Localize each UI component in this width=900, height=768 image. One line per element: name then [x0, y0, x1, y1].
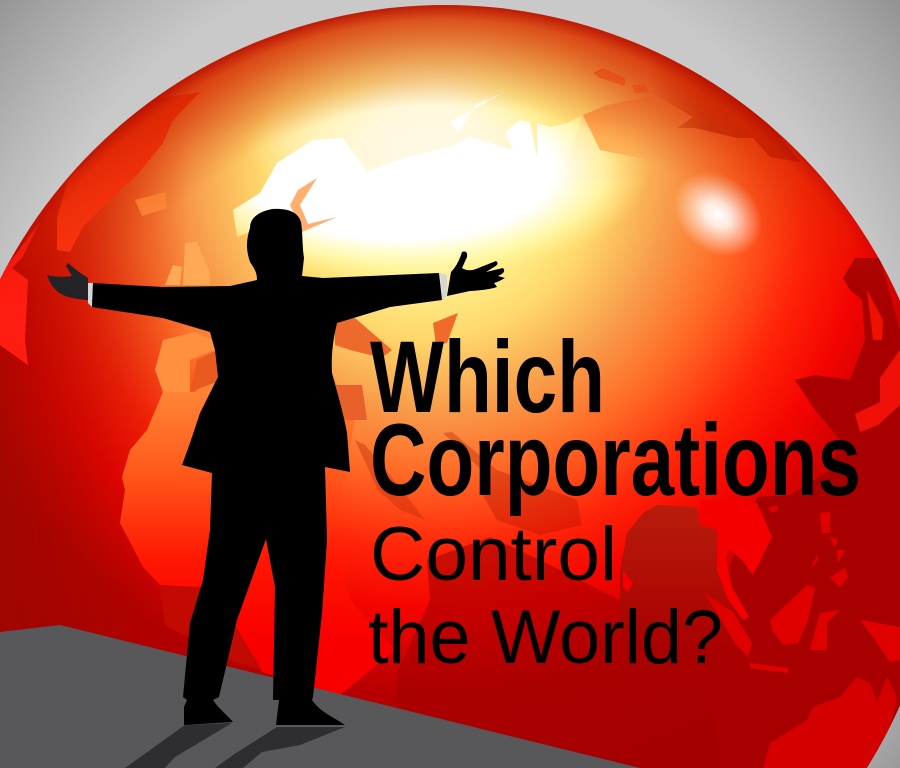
man silhouette [47, 209, 505, 725]
land: australia [763, 677, 897, 768]
land: korea sliver [867, 290, 883, 340]
island: java [750, 663, 788, 673]
land: japan [855, 350, 900, 432]
island: borneo [770, 585, 815, 645]
land: egypt patch [333, 385, 367, 420]
title line: Control: Control [370, 512, 617, 597]
floor [0, 625, 640, 768]
title [368, 320, 861, 680]
land: iceland [135, 192, 167, 216]
land: mediterranean patch [190, 351, 218, 392]
island: sulawesi [810, 610, 840, 650]
left hand [47, 263, 88, 300]
land: africa [120, 370, 395, 695]
title line: Which: Which [370, 320, 605, 434]
land: gulf of guinea [160, 585, 262, 670]
islands: indonesia and neighbours [623, 505, 900, 768]
land: ireland [165, 265, 182, 285]
island: sumatra [704, 593, 752, 657]
land: china and se asia [728, 258, 900, 768]
land: greece patch [433, 313, 458, 345]
island: philippines [810, 512, 848, 587]
right cuff [440, 273, 447, 300]
island: hainan [768, 505, 778, 513]
island: sri lanka [623, 570, 633, 592]
shoe shadows [125, 723, 345, 768]
land: arabia [480, 470, 582, 535]
land: greenland [57, 92, 200, 252]
highlight: specular [676, 174, 760, 255]
right hand [447, 252, 505, 296]
land: canada edge [0, 222, 40, 365]
island: new guinea [860, 620, 900, 662]
left cuff [88, 283, 93, 307]
body [92, 209, 442, 725]
land: iberia [155, 332, 214, 392]
land: russia east shade [663, 67, 800, 162]
land: europe and russia [233, 115, 643, 270]
land: novaya zemlya [450, 92, 505, 133]
islands: north pacific [593, 68, 650, 93]
land: red sea and gulf [355, 432, 497, 520]
land: india [620, 505, 731, 634]
land: britain [183, 242, 210, 285]
land: baltic sea [290, 178, 337, 232]
highlight: top glow [252, 91, 556, 172]
land: east africa and ocean shade [397, 537, 706, 744]
land: russia orange [576, 98, 646, 156]
land: turkey patch [335, 318, 392, 358]
title line: the World?: the World? [368, 595, 723, 680]
land: bay of bengal bright wedge [700, 500, 772, 620]
